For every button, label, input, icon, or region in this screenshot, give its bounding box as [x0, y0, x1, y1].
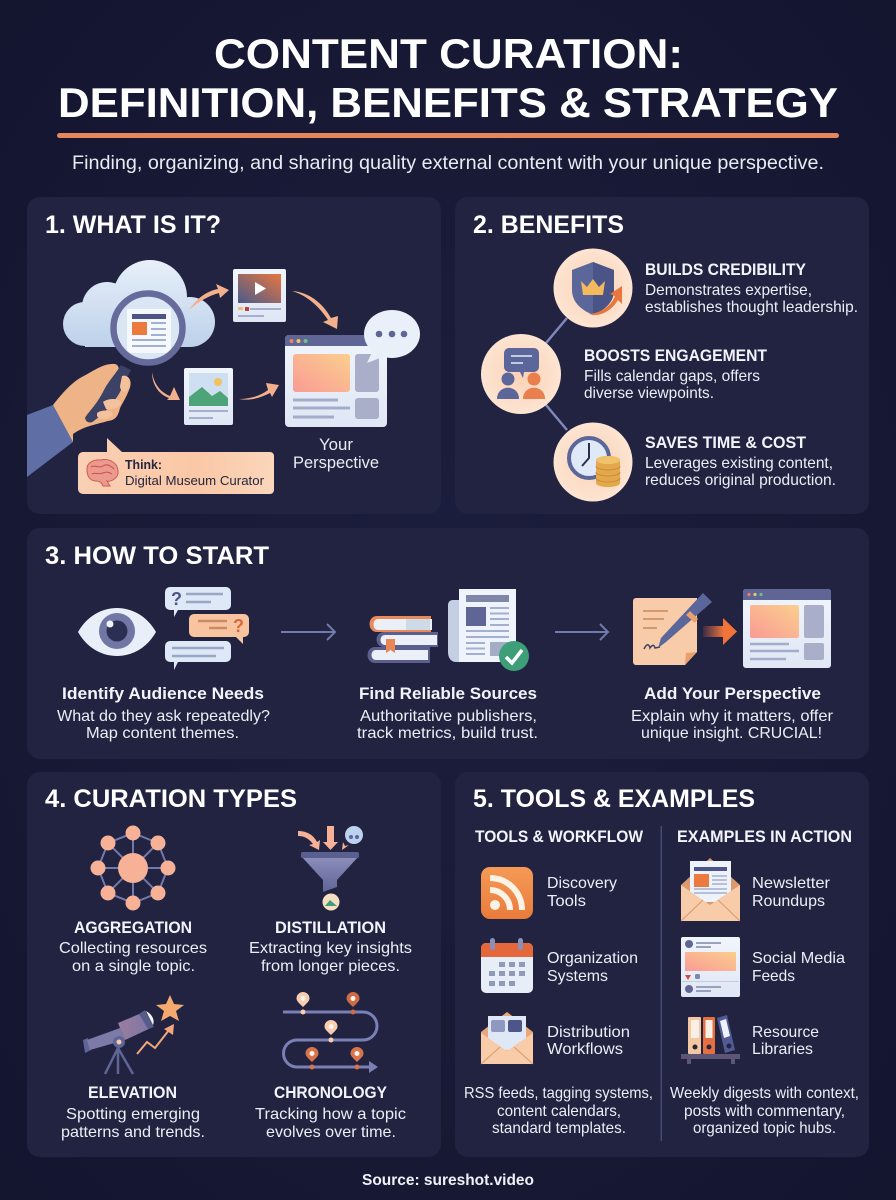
benefit: boosts engagement: [584, 347, 767, 402]
icon: shield and crown: [554, 248, 632, 328]
icon: clock and coins: [554, 422, 632, 502]
benefit: saves time and cost: reduces original production.: [645, 472, 836, 489]
subtitle: Finding, organizing, and sharing quality external content with your unique perspective.: [72, 152, 824, 174]
type: elevation: patterns and trends.: [61, 1124, 205, 1141]
callout: digital museum curator: Digital Museum Curator: [125, 473, 265, 488]
type: chronology: Tracking how a topic: [255, 1106, 406, 1123]
panel: tools and examples: [455, 772, 869, 1157]
icon: chronology timeline: [283, 992, 378, 1073]
type: distillation: from longer pieces.: [261, 958, 400, 975]
heading: what is it: 1. WHAT IS IT?: [45, 211, 221, 239]
type: chronology: CHRONOLOGY: [274, 1084, 387, 1102]
icon: video card: [233, 269, 286, 322]
icon: newsletter envelope: [681, 858, 740, 921]
benefit: builds credibility: BUILDS CREDIBILITY: [645, 261, 806, 279]
benefit: boosts engagement: BOOSTS ENGAGEMENT: [584, 347, 767, 365]
label: discovery tools: Tools: [547, 893, 586, 910]
label: newsletter roundups: Newsletter: [752, 875, 831, 892]
icon: telescope with star: [83, 995, 184, 1074]
callout: digital museum curator: [78, 438, 274, 494]
type: aggregation: Collecting resources: [59, 940, 207, 957]
benefit: builds credibility: [645, 261, 858, 316]
label: resource libraries: Libraries: [752, 1041, 813, 1058]
benefit: saves time and cost: [645, 434, 836, 489]
icon: hand holding magnifier: [27, 364, 131, 477]
step: find reliable sources: [357, 685, 538, 742]
label: social media feeds: Feeds: [752, 968, 795, 985]
icon: browser window: [285, 335, 387, 427]
icon: aggregation network: [90, 826, 176, 910]
icon: social media card: [681, 937, 740, 997]
icon: question bubbles: [165, 587, 249, 670]
type: chronology: evolves over time.: [266, 1124, 396, 1141]
text: tools summary: [464, 1085, 653, 1137]
heading: benefits: 2. BENEFITS: [473, 211, 624, 239]
icon: question bubbles: ?: [233, 616, 244, 636]
type: aggregation: [59, 919, 207, 975]
icon: eye: [78, 608, 156, 656]
label: your perspective: Your: [319, 436, 354, 454]
arrow: step 2 to 3: [555, 624, 608, 640]
type: elevation: ELEVATION: [88, 1084, 177, 1102]
column heading: tools and workflow: TOOLS & WORKFLOW: [475, 828, 643, 846]
label: your perspective: [293, 436, 379, 472]
icon: stack of books: [368, 616, 438, 663]
icon: magnifier with document: [114, 294, 182, 362]
benefit: builds credibility: Demonstrates expertise,: [645, 282, 812, 299]
step: identify audience needs: [57, 685, 270, 742]
icon: rss: [481, 867, 533, 919]
type: chronology: [255, 1084, 406, 1141]
label: resource libraries: Resource: [752, 1024, 819, 1041]
step: add your perspective: Explain why it matters, offer: [631, 708, 834, 725]
source line: Source: sureshot.video: [362, 1172, 534, 1189]
step: identify audience needs: Map content themes.: [86, 725, 239, 742]
label: your perspective: Perspective: [293, 454, 379, 472]
icon: brain: [87, 460, 118, 486]
benefit: boosts engagement: Fills calendar gaps, offers: [584, 368, 760, 385]
text: tools summary: RSS feeds, tagging systems,: [464, 1085, 653, 1102]
icon: image card: [184, 368, 233, 425]
arrows: content flow: [152, 284, 338, 400]
icon: speech bubble: [364, 310, 420, 363]
type: aggregation: AGGREGATION: [74, 919, 192, 937]
title: DEFINITION, BENEFITS & STRATEGY: [58, 79, 838, 126]
label: newsletter roundups: Roundups: [752, 893, 825, 910]
label: distribution workflows: Distribution: [547, 1024, 630, 1041]
label: distribution workflows: [547, 1024, 630, 1058]
label: resource libraries: [752, 1024, 819, 1058]
label: organization systems: Systems: [547, 968, 608, 985]
panel: benefits: [455, 197, 869, 514]
label: discovery tools: Discovery: [547, 875, 617, 892]
step: add your perspective: Add Your Perspective: [644, 685, 821, 703]
step: add your perspective: unique insight. CRUCIAL!: [641, 725, 822, 742]
text: tools summary: standard templates.: [492, 1120, 626, 1137]
step: find reliable sources: Authoritative publishers,: [360, 708, 537, 725]
step: add your perspective: [631, 685, 834, 742]
title underline: [57, 133, 839, 138]
benefit: saves time and cost: Leverages existing content,: [645, 455, 833, 472]
step: find reliable sources: track metrics, build trust.: [357, 725, 538, 742]
type: elevation: [61, 1084, 205, 1141]
type: aggregation: on a single topic.: [72, 958, 195, 975]
panel: what is it: [27, 197, 441, 514]
text: examples summary: [670, 1085, 859, 1137]
benefit: builds credibility: establishes thought leadership.: [645, 299, 858, 316]
title: CONTENT CURATION:: [214, 30, 683, 77]
step: find reliable sources: Find Reliable Sources: [359, 685, 537, 703]
callout: digital museum curator: Think:: [125, 458, 162, 472]
heading: how to start: 3. HOW TO START: [45, 542, 269, 570]
label: organization systems: Organization: [547, 950, 638, 967]
panel: how to start: [27, 528, 869, 759]
icon: cloud: [63, 260, 215, 347]
heading: tools and examples: 5. TOOLS & EXAMPLES: [473, 785, 755, 813]
icon: resource binders: [681, 1015, 740, 1064]
text: examples summary: organized topic hubs.: [693, 1120, 836, 1137]
panel: curation types: [27, 772, 441, 1157]
icon: newspaper with check: [448, 589, 529, 671]
label: discovery tools: [547, 875, 617, 910]
benefit: saves time and cost: SAVES TIME & COST: [645, 434, 806, 452]
type: distillation: Extracting key insights: [249, 940, 412, 957]
icon: people talking: [481, 334, 561, 414]
icon: distribution envelope: [481, 1012, 533, 1064]
icon: calendar: [481, 938, 533, 993]
column heading: examples in action: EXAMPLES IN ACTION: [677, 828, 852, 846]
icon: browser window: [743, 589, 831, 668]
step: identify audience needs: Identify Audience Needs: [62, 685, 264, 703]
text: examples summary: Weekly digests with context,: [670, 1085, 859, 1102]
type: elevation: Spotting emerging: [66, 1106, 200, 1123]
icon: question bubbles: ?: [171, 589, 182, 609]
heading: curation types: 4. CURATION TYPES: [45, 785, 297, 813]
type: distillation: DISTILLATION: [275, 919, 386, 937]
icon: note with pen: [633, 593, 712, 665]
arrow: note to browser: [703, 618, 737, 645]
icon: distillation funnel: [298, 826, 363, 910]
step: identify audience needs: What do they ask repeatedly?: [57, 708, 270, 725]
label: social media feeds: Social Media: [752, 950, 845, 967]
label: social media feeds: [752, 950, 845, 985]
label: organization systems: [547, 950, 638, 985]
label: newsletter roundups: [752, 875, 831, 910]
text: examples summary: posts with commentary,: [684, 1103, 845, 1120]
label: distribution workflows: Workflows: [547, 1041, 623, 1058]
title: [58, 30, 838, 126]
type: distillation: [249, 919, 412, 975]
benefit: boosts engagement: diverse viewpoints.: [584, 385, 714, 402]
text: tools summary: content calendars,: [497, 1103, 621, 1120]
arrow: step 1 to 2: [281, 624, 335, 640]
